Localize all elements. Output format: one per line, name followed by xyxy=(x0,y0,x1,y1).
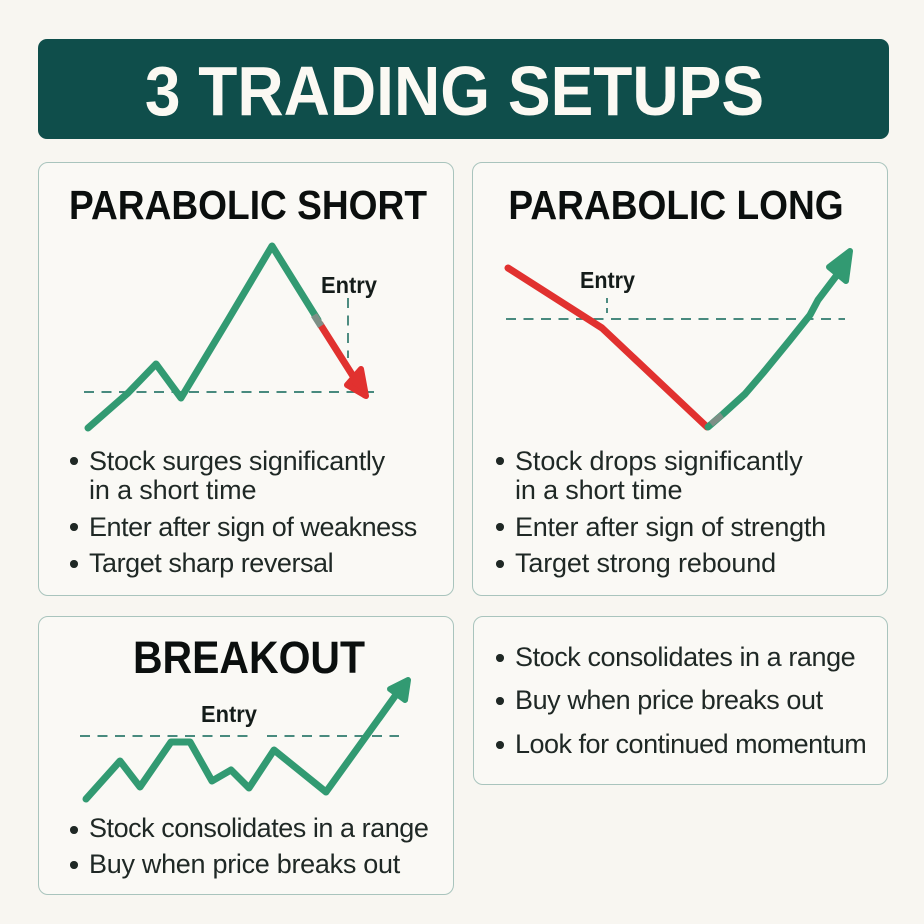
bullets: parabolic short: Target sharp reversal xyxy=(89,548,333,578)
bullets: breakout xyxy=(70,813,428,879)
heading: breakout: BREAKOUT xyxy=(133,632,365,683)
bullets: parabolic long: in a short time xyxy=(515,475,682,505)
bullets: parabolic long: Enter after sign of strength xyxy=(515,512,826,542)
title: 3 TRADING SETUPS xyxy=(145,52,764,130)
chart: parabolic long: Entry xyxy=(580,267,635,293)
chart: parabolic short: Entry xyxy=(321,272,377,298)
chart: parabolic short xyxy=(84,242,377,432)
panel: breakout rules continued xyxy=(473,616,888,785)
bullets: breakout rules continued: Stock consolidates in a range xyxy=(515,642,855,672)
bullets: breakout rules continued: Buy when price breaks out xyxy=(515,685,823,715)
bullets: breakout rules continued: Look for continued momentum xyxy=(515,729,866,759)
chart: breakout xyxy=(80,677,411,802)
bullets: parabolic short: Stock surges significantly xyxy=(89,446,385,476)
bullets: parabolic long: Target strong rebound xyxy=(515,548,776,578)
heading: parabolic short: PARABOLIC SHORT xyxy=(68,182,426,228)
heading: parabolic long: PARABOLIC LONG xyxy=(508,182,844,228)
title banner xyxy=(38,39,889,139)
chart: parabolic long xyxy=(504,248,853,430)
bullets: parabolic short: in a short time xyxy=(89,475,256,505)
panel: breakout xyxy=(38,616,454,895)
bullets: breakout: Buy when price breaks out xyxy=(89,849,400,879)
bullets: parabolic long: Stock drops significantly xyxy=(515,446,803,476)
bullets: parabolic short: Enter after sign of weakness xyxy=(89,512,417,542)
panel: parabolic long xyxy=(472,162,888,596)
chart: breakout: Entry xyxy=(201,701,257,727)
bullets: breakout: Stock consolidates in a range xyxy=(89,813,428,843)
bullets: breakout rules continued xyxy=(496,642,866,759)
panel: parabolic short xyxy=(38,162,454,596)
bullets: parabolic short xyxy=(70,446,417,578)
bullets: parabolic long xyxy=(496,446,826,578)
